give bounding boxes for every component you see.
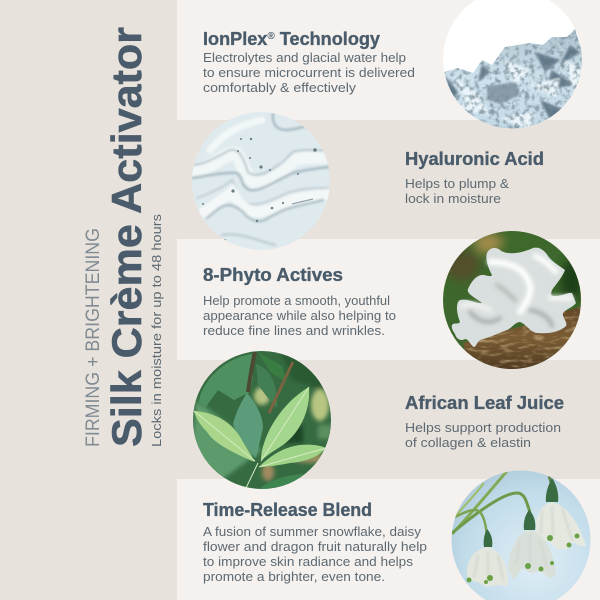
icon: white fungus photo — [442, 230, 590, 372]
description: flower and dragon fruit naturally help — [203, 539, 427, 554]
description: to ensure microcurrent is delivered — [203, 65, 415, 80]
description: Help promote a smooth, youthful — [203, 293, 390, 308]
description — [405, 176, 509, 206]
panel: IonPlex Technology — [203, 0, 584, 130]
icon: glacial ice photo — [443, 0, 584, 130]
panel: Hyaluronic Acid — [190, 110, 544, 252]
description: reduce fine lines and wrinkles. — [203, 323, 385, 338]
description: of collagen & elastin — [405, 435, 531, 450]
description: to improve skin radiance and helps — [203, 554, 414, 569]
heading: ® — [267, 31, 275, 42]
panel: light bands — [177, 0, 600, 600]
panel: Time-Release Blend — [203, 469, 592, 600]
description — [203, 50, 415, 95]
description: Helps to plump & — [405, 176, 509, 191]
description: lock in moisture — [405, 191, 501, 206]
description — [203, 293, 396, 338]
icon: green leaf photo — [190, 350, 334, 495]
heading: Hyaluronic Acid — [405, 149, 544, 169]
product name: Silk Crème Activator — [103, 27, 150, 447]
icon: snowflake flower photo — [450, 469, 592, 600]
description: comfortably & effectively — [203, 80, 357, 95]
product title block — [83, 27, 164, 447]
description: Electrolytes and glacial water help — [203, 50, 406, 65]
heading: African Leaf Juice — [405, 393, 564, 413]
icon: hyaluronic gel photo — [190, 110, 332, 252]
description: Helps support production — [405, 420, 561, 435]
description — [405, 420, 561, 450]
product tagline: Locks in moisture for up to 48 hours — [149, 213, 164, 447]
panel: African Leaf Juice — [190, 350, 564, 495]
panel: 8-Phyto Actives — [203, 230, 590, 372]
description: A fusion of summer snowflake, daisy — [203, 524, 422, 539]
description: appearance while also helping to — [203, 308, 396, 323]
heading: Time-Release Blend — [203, 500, 372, 520]
eyebrow: firming + brightening: FIRMING + BRIGHTENING — [83, 228, 104, 447]
heading: IonPlex — [203, 29, 267, 49]
description: promote a brighter, even tone. — [203, 569, 385, 584]
heading: Technology — [275, 29, 380, 49]
heading: 8-Phyto Actives — [203, 265, 343, 285]
description — [203, 524, 427, 584]
